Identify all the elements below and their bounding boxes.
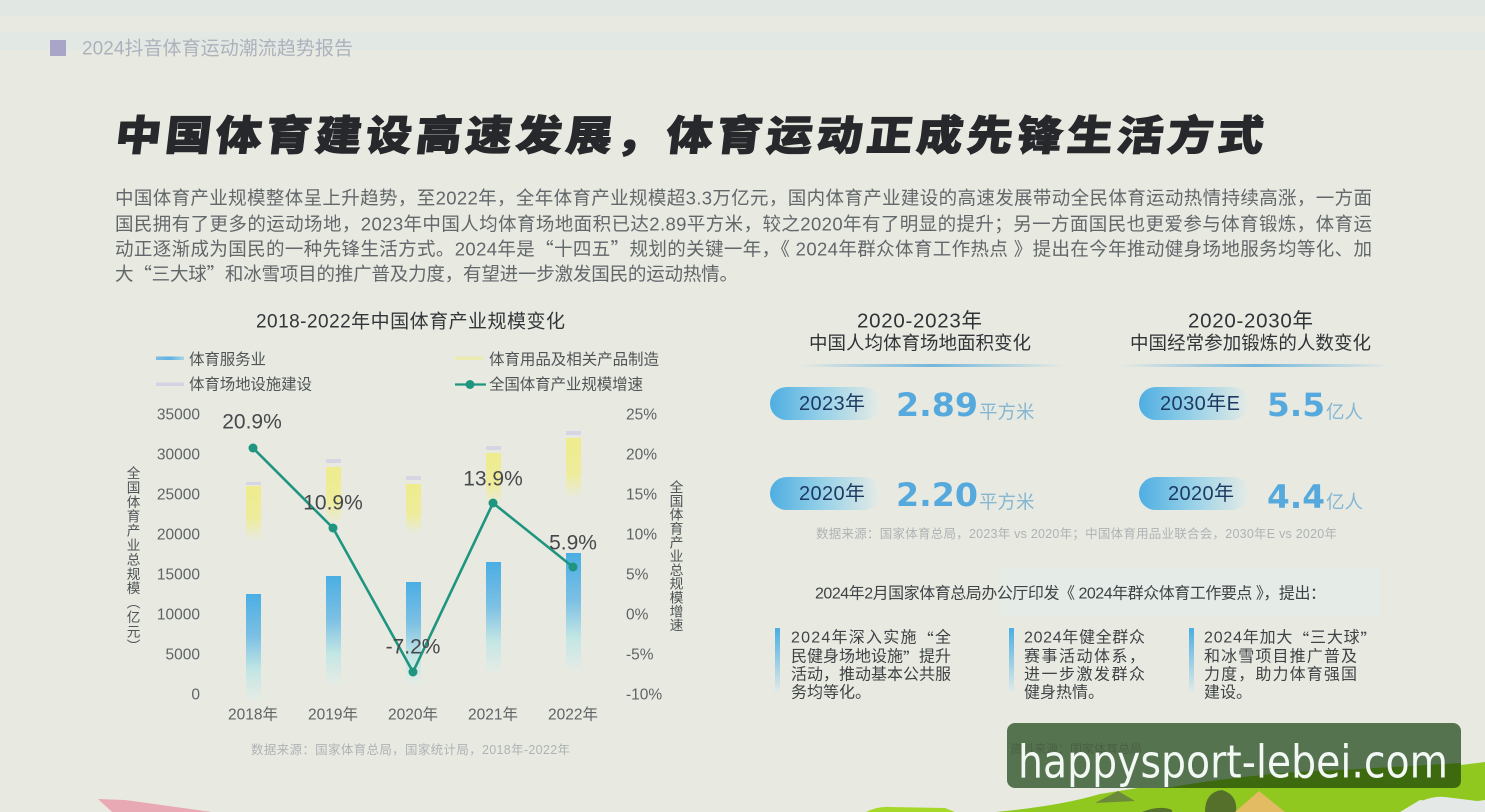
left axis labels: 20000 bbox=[157, 526, 200, 544]
stat: 2023: 2023年 bbox=[799, 392, 865, 415]
decoration: green hills and tent bbox=[866, 762, 1485, 812]
left axis labels: 5000 bbox=[166, 646, 200, 664]
panel heading: 2020-2023年 bbox=[857, 310, 982, 332]
stat: 2020: 亿人 bbox=[1326, 492, 1363, 512]
chart legend: 体育场地设施建设 bbox=[189, 376, 312, 394]
policy point 3 bbox=[1189, 626, 1377, 702]
intro paragraph: 国民拥有了更多的运动场地，2023年中国人均体育场地面积已达2.89平方米，较之2020年有了明显的提升；另一方面国民也更爱参与体育锻炼，体育运 bbox=[115, 214, 1372, 234]
stat: 2023: 2.89 bbox=[896, 386, 978, 424]
stat: 2023 bbox=[770, 386, 1035, 424]
intro paragraph: 动正逐渐成为国民的一种先锋生活方式。2024年是“十四五”规划的关键一年，《 2024年群众体育工作热点 》提出在今年推动健身场地服务均等化、加 bbox=[115, 236, 1372, 262]
year labels: 2022年 bbox=[548, 706, 598, 724]
stat: 2030E bbox=[1139, 386, 1363, 424]
year labels: 2019年 bbox=[308, 706, 358, 724]
year labels bbox=[228, 706, 598, 724]
growth rate labels bbox=[222, 410, 597, 658]
policy point 2: 进一步激发群众 bbox=[1024, 666, 1145, 684]
left axis labels: 35000 bbox=[157, 406, 200, 424]
chart source: 数据来源：国家体育总局，国家统计局，2018年-2022年 bbox=[251, 742, 570, 757]
stat: 2020: 2.20 bbox=[896, 476, 978, 514]
policy point 3: 2024年加大“三大球” bbox=[1204, 626, 1377, 650]
year labels: 2020年 bbox=[388, 706, 438, 724]
panel heading: 2020-2030年 bbox=[1188, 310, 1313, 332]
right axis title: 全国体育产业总规模增速 bbox=[668, 479, 683, 633]
stat: 2020 bbox=[770, 476, 1035, 514]
policy point 2: 赛事活动体系， bbox=[1024, 646, 1145, 666]
right axis labels bbox=[626, 406, 662, 704]
right axis labels: 25% bbox=[626, 406, 657, 424]
watermark: 资料来源：国家体育总局 bbox=[1010, 741, 1142, 756]
panel: industry scale chart bbox=[124, 310, 683, 757]
policy point 1: 活动，推动基本公共服 bbox=[791, 666, 951, 684]
intro paragraph bbox=[115, 188, 1372, 287]
right axis labels: 0% bbox=[626, 606, 649, 624]
stat: 2020: 2020年 bbox=[1168, 482, 1234, 505]
panel: policy points bbox=[775, 568, 1380, 702]
right axis labels: 10% bbox=[626, 526, 657, 544]
growth rate line bbox=[248, 444, 578, 676]
growth rate labels: 20.9% bbox=[222, 410, 282, 434]
chart legend: 体育用品及相关产品制造 bbox=[489, 350, 659, 368]
left axis labels: 0 bbox=[191, 686, 200, 704]
year labels: 2018年 bbox=[228, 706, 278, 724]
right axis labels: 20% bbox=[626, 446, 657, 464]
panel: per-capita sports area bbox=[770, 310, 1065, 514]
panel heading: 中国经常参加锻炼的人数变化 bbox=[1130, 332, 1371, 354]
stat: 2030E: 2030年E bbox=[1160, 392, 1240, 415]
right axis labels: -5% bbox=[626, 646, 654, 664]
bars: sports services bbox=[246, 553, 581, 700]
year labels: 2021年 bbox=[468, 706, 518, 724]
intro paragraph: 中国体育产业规模整体呈上升趋势，至2022年，全年体育产业规模超3.3万亿元，国内体育产业建设的高速发展带动全民体育运动热情持续高涨，一方面 bbox=[115, 188, 1372, 208]
policy point 3: 和冰雪项目推广普及 bbox=[1204, 648, 1357, 666]
panel heading bbox=[809, 310, 1031, 354]
chart legend: 全国体育产业规模增速 bbox=[489, 376, 643, 394]
left axis labels: 15000 bbox=[157, 566, 200, 584]
stat: 2023: 平方米 bbox=[979, 402, 1035, 422]
policy point 2: 2024年健全群众 bbox=[1024, 628, 1145, 646]
panel: regular exercisers bbox=[1120, 310, 1390, 516]
chart title: 2018-2022年中国体育产业规模变化 bbox=[256, 310, 565, 332]
policy point 2: 健身热情。 bbox=[1024, 684, 1104, 702]
stat: 2030E: 5.5 bbox=[1267, 386, 1325, 424]
report header: 2024抖音体育运动潮流趋势报告 bbox=[82, 38, 353, 60]
policy point 3: 建设。 bbox=[1204, 684, 1252, 702]
policy point 1: 务均等化。 bbox=[791, 684, 871, 702]
chart legend bbox=[156, 350, 659, 394]
stat: 2020: 平方米 bbox=[979, 492, 1035, 512]
policy heading: 2024年2月国家体育总局办公厅印发《 2024年群众体育工作要点 》，提出： bbox=[815, 584, 1326, 602]
stat: 2020 bbox=[1139, 477, 1363, 516]
policy point 1: 2024年深入实施“全 bbox=[791, 626, 951, 650]
left axis title: 全国体育产业总规模（亿元） bbox=[124, 465, 140, 653]
growth rate labels: 10.9% bbox=[303, 492, 363, 514]
policy point 3: 力度，助力体育强国 bbox=[1204, 666, 1357, 684]
policy point 1 bbox=[775, 626, 951, 702]
title: 中国体育建设高速发展，体育运动正成先锋生活方式 bbox=[112, 102, 1268, 162]
left axis labels: 10000 bbox=[157, 606, 200, 624]
intro paragraph: 大“三大球”和冰雪项目的推广普及力度，有望进一步激发国民的运动热情。 bbox=[115, 261, 738, 287]
growth rate labels: 13.9% bbox=[463, 468, 523, 490]
policy point 1: 民健身场地设施”提升 bbox=[791, 645, 951, 669]
left axis labels: 25000 bbox=[157, 486, 200, 504]
policy point 2 bbox=[1009, 628, 1145, 702]
decoration: pink shape bbox=[98, 799, 212, 812]
bars: sporting goods bbox=[246, 438, 581, 540]
growth rate labels: -7.2% bbox=[386, 636, 440, 658]
stat: 2020: 2020年 bbox=[799, 482, 865, 505]
growth rate labels: 5.9% bbox=[549, 532, 597, 554]
chart legend: 体育服务业 bbox=[189, 350, 266, 368]
panel heading: 中国人均体育场地面积变化 bbox=[809, 332, 1031, 354]
right axis labels: -10% bbox=[626, 686, 662, 704]
right axis labels: 15% bbox=[626, 486, 657, 504]
panel heading bbox=[1130, 310, 1371, 354]
left axis labels: 30000 bbox=[157, 446, 200, 464]
stat: 2020: 4.4 bbox=[1267, 478, 1325, 516]
bars: venue construction bbox=[246, 431, 581, 485]
stat: 2030E: 亿人 bbox=[1326, 402, 1363, 422]
left axis labels bbox=[157, 406, 200, 704]
right axis labels: 5% bbox=[626, 566, 649, 584]
stats source: 数据来源：国家体育总局，2023年 vs 2020年；中国体育用品业联合会，2030年E vs 2020年 bbox=[816, 526, 1337, 541]
